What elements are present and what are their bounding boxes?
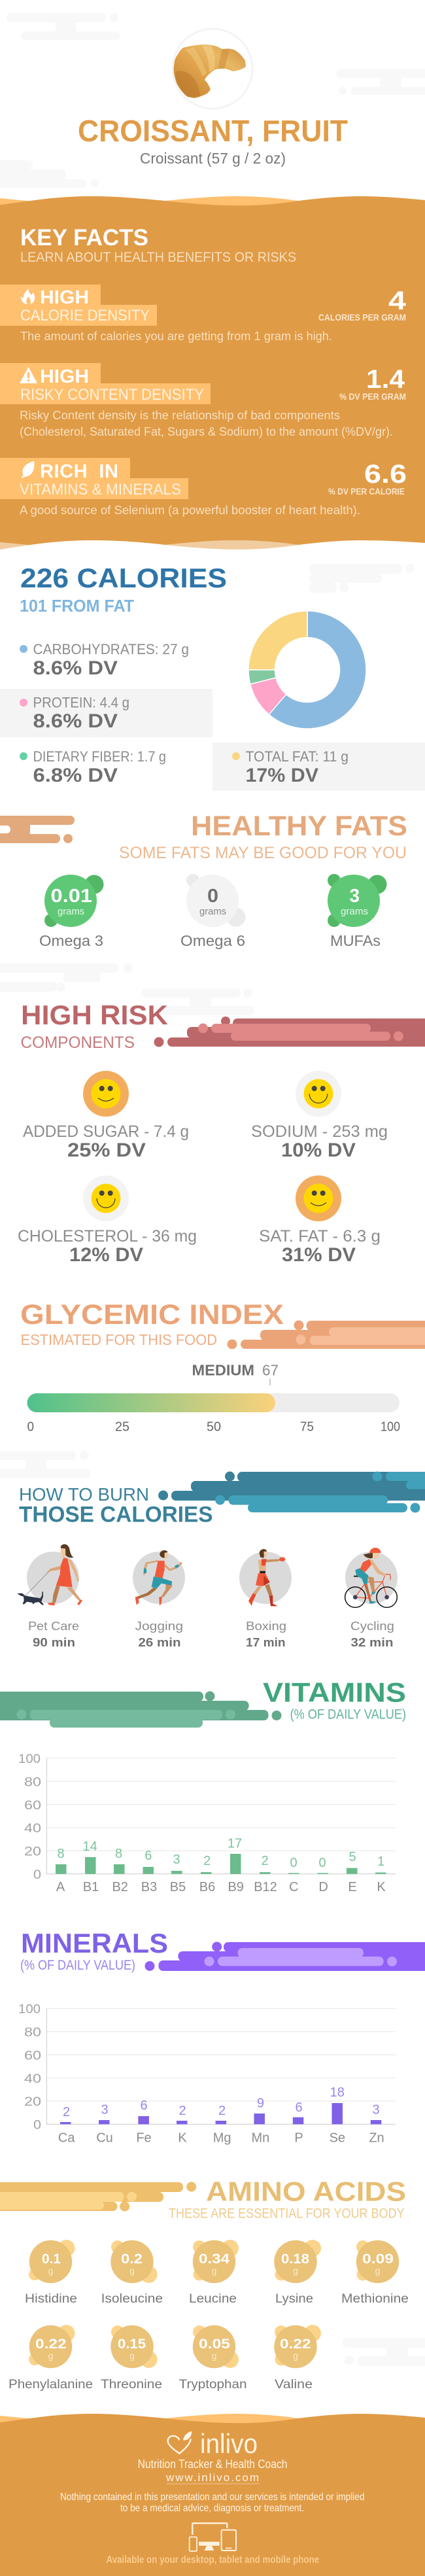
- amino: threonine: [101, 2325, 162, 2392]
- bar chart: vitamins: C: [289, 1880, 299, 1894]
- bar chart: minerals: 6: [140, 2098, 148, 2113]
- icon: woman walking dog: [17, 1544, 82, 1605]
- panel: footer: [0, 2414, 425, 2576]
- amino: methionine: 0.09: [362, 2252, 394, 2267]
- bar chart: minerals: 2: [178, 2104, 186, 2118]
- amino: histidine: [25, 2240, 77, 2306]
- heading: 226 calories: 226 CALORIES: [20, 563, 227, 593]
- heading: AMINO ACIDS: [206, 2176, 406, 2207]
- disclaimer: Nothing contained in this presentation and our services is intended or implied: [60, 2492, 365, 2503]
- gauge scale: 75: [300, 1419, 314, 1434]
- bar chart: minerals: 3: [101, 2103, 109, 2117]
- duration: 17 min: [246, 1636, 286, 1649]
- icon: leaf: [22, 461, 34, 478]
- rating: HIGH: [40, 366, 89, 387]
- value: 4: [388, 287, 407, 315]
- subheading: (% OF DAILY VALUE): [20, 1958, 135, 1973]
- decoration: [158, 1472, 425, 1512]
- bar chart: vitamins: B5: [170, 1880, 186, 1894]
- fact: vitamins and minerals: [0, 458, 407, 517]
- legend: carbohydrates: [20, 641, 189, 679]
- availability note: Available on your desktop, tablet and mobile phone: [106, 2554, 319, 2566]
- amino: lysine: 0.18: [281, 2252, 309, 2267]
- logo: wordmark: inlivo: [200, 2428, 258, 2459]
- item: mufas: MUFAs: [330, 932, 381, 949]
- amino: phenylalanine: 0.22: [35, 2337, 67, 2352]
- amino: threonine: Threonine: [101, 2378, 162, 2392]
- amino: leucine: [189, 2240, 239, 2306]
- item: saturated fat: 31% DV: [282, 1244, 356, 1266]
- amino: valine: g: [293, 2350, 298, 2361]
- logo: heart and leaf: [168, 2431, 192, 2454]
- legend: carbohydrates: 8.6% DV: [33, 657, 118, 679]
- bar chart: minerals: 40: [24, 2072, 41, 2086]
- bar chart: minerals: [18, 2003, 396, 2146]
- bar chart: minerals: Fe: [136, 2131, 152, 2146]
- amino: phenylalanine: g: [48, 2350, 53, 2361]
- activity: cycling: [345, 1548, 398, 1649]
- item: saturated fat: [259, 1175, 381, 1266]
- bar chart: vitamins: 0: [290, 1856, 298, 1870]
- amino: isoleucine: 0.2: [121, 2252, 143, 2267]
- heading: GLYCEMIC INDEX: [20, 1299, 284, 1331]
- bar chart: vitamins: A: [56, 1880, 65, 1894]
- gauge label: 67: [262, 1362, 279, 1379]
- description: The amount of calories you are getting from 1 gram is high.: [20, 330, 332, 343]
- item: sodium: SODIUM - 253 mg: [251, 1123, 388, 1141]
- gauge label: [192, 1362, 279, 1385]
- bar chart: minerals: K: [178, 2131, 187, 2146]
- bar chart: minerals: Mn: [252, 2131, 269, 2146]
- panel: glycemic index: [20, 1299, 425, 1434]
- decoration: [0, 2182, 196, 2211]
- bar chart: vitamins: 60: [24, 1799, 41, 1813]
- description: [20, 409, 393, 438]
- bar chart: vitamins: 20: [24, 1845, 41, 1859]
- amino: threonine: 0.15: [118, 2337, 146, 2352]
- label: Boxing: [246, 1620, 286, 1633]
- subheading: COMPONENTS: [21, 1034, 135, 1052]
- gauge scale: 100: [381, 1419, 400, 1434]
- fact: calorie density: [0, 285, 407, 343]
- amino: lysine: Lysine: [275, 2292, 313, 2306]
- fact name: VITAMINS & MINERALS: [20, 481, 181, 498]
- bar chart: minerals: Cu: [96, 2131, 113, 2146]
- bar chart: vitamins: 8: [115, 1847, 122, 1861]
- bar chart: vitamins: 17: [228, 1837, 242, 1851]
- panel: vitamins: [0, 1677, 406, 1894]
- subheading: (% OF DAILY VALUE): [290, 1707, 406, 1722]
- unit: CALORIES PER GRAM: [318, 312, 406, 322]
- bar chart: minerals: Zn: [369, 2131, 384, 2146]
- bar chart: minerals: 2: [218, 2104, 226, 2118]
- amino: histidine: Histidine: [25, 2292, 77, 2306]
- panel: high risk components: [18, 1000, 425, 1266]
- bar chart: vitamins: B2: [112, 1880, 128, 1894]
- value: 6.6: [364, 460, 407, 489]
- activity: boxing: [239, 1549, 292, 1649]
- amino: tryptophan: [179, 2325, 247, 2392]
- icon: warning: [20, 367, 37, 383]
- heading: HEALTHY FATS: [191, 810, 407, 842]
- legend: protein: 8.6% DV: [33, 710, 118, 732]
- item: sodium: 10% DV: [281, 1140, 356, 1161]
- bar chart: minerals: P: [294, 2131, 303, 2146]
- icon: devices: [190, 2523, 236, 2551]
- legend: dietary fiber: 6.8% DV: [33, 765, 118, 786]
- heading: MINERALS: [21, 1928, 168, 1958]
- decoration: [145, 1941, 425, 1971]
- rating: HIGH: [40, 287, 89, 308]
- amino: lysine: [274, 2240, 321, 2306]
- gauge scale: 0: [27, 1419, 34, 1434]
- label: Cycling: [350, 1620, 394, 1633]
- subheading: from fat: 101 FROM FAT: [20, 596, 134, 616]
- icon: cyclist: [345, 1548, 397, 1607]
- item: mufas: grams: [341, 906, 368, 917]
- icon: croissant in circle: [173, 29, 252, 109]
- subheading: LEARN ABOUT HEALTH BENEFITS OR RISKS: [20, 250, 296, 265]
- legend: total fat: 17% DV: [246, 765, 318, 786]
- bar chart: minerals: Se: [330, 2131, 345, 2146]
- item: omega 6: Omega 6: [180, 932, 245, 949]
- bar chart: minerals: Ca: [58, 2131, 75, 2146]
- amino: leucine: Leucine: [189, 2292, 237, 2306]
- item: omega 6: [180, 874, 246, 949]
- amino: tryptophan: g: [212, 2350, 216, 2361]
- bar chart: vitamins: B1: [83, 1880, 99, 1894]
- disclaimer: to be a medical advice, diagnosis or treatment.: [120, 2503, 304, 2514]
- legend: protein: [20, 695, 129, 732]
- bar chart: vitamins: D: [318, 1880, 328, 1894]
- description: (Cholesterol, Saturated Fat, Sugars & Sodium) to the amount (%DV/gr).: [20, 425, 393, 438]
- bar chart: vitamins: B6: [199, 1880, 215, 1894]
- decoration: [0, 816, 75, 843]
- amino: methionine: Methionine: [341, 2292, 409, 2306]
- bar chart: vitamins: K: [377, 1880, 386, 1894]
- bar chart: minerals: 9: [257, 2097, 264, 2111]
- bar chart: minerals: 18: [330, 2085, 345, 2100]
- bar chart: vitamins: [18, 1752, 396, 1894]
- description: Risky Content density is the relationship of bad components: [20, 409, 340, 422]
- bar chart: vitamins: 5: [348, 1850, 356, 1864]
- heading line 2: THOSE CALORIES: [19, 1502, 213, 1527]
- bar chart: vitamins: 0: [33, 1868, 41, 1882]
- item: omega 3: 0.01: [51, 886, 92, 907]
- legend: total fat: [232, 748, 348, 786]
- bar chart: vitamins: 0: [318, 1856, 326, 1870]
- subheading: SOME FATS MAY BE GOOD FOR YOU: [119, 844, 407, 862]
- legend: protein: PROTEIN: 4.4 g: [33, 695, 129, 710]
- bar chart: vitamins: 100: [18, 1752, 41, 1766]
- item: omega 6: grams: [199, 906, 226, 917]
- bar chart: vitamins: B3: [141, 1880, 157, 1894]
- heading: key facts: KEY FACTS: [20, 225, 148, 251]
- donut chart: [248, 611, 366, 729]
- serving size: Croissant (57 g / 2 oz): [140, 150, 286, 167]
- amino: threonine: g: [129, 2350, 135, 2361]
- item: omega 3: [39, 875, 103, 949]
- item: saturated fat: SAT. FAT - 6.3 g: [259, 1227, 381, 1245]
- fact: risky content density: [0, 363, 406, 438]
- amino: isoleucine: g: [129, 2265, 135, 2276]
- panel: minerals: [18, 1928, 425, 2146]
- item: omega 3: grams: [58, 906, 84, 917]
- item: cholesterol: CHOLESTEROL - 36 mg: [18, 1227, 197, 1245]
- amino: tryptophan: 0.05: [199, 2337, 230, 2352]
- duration: 26 min: [139, 1636, 180, 1649]
- tagline: Nutrition Tracker & Health Coach: [138, 2458, 288, 2471]
- fact name: CALORIE DENSITY: [20, 307, 150, 324]
- gauge label: MEDIUM: [192, 1362, 254, 1379]
- amino: valine: [274, 2325, 321, 2392]
- label: Pet Care: [28, 1620, 79, 1633]
- icon: runner: [135, 1550, 182, 1606]
- disclaimer: [60, 2492, 365, 2514]
- item: omega 3: Omega 3: [39, 932, 103, 949]
- gauge bar: [27, 1393, 400, 1412]
- label: Jogging: [135, 1620, 183, 1633]
- value: 1.4: [366, 365, 405, 394]
- panel: key facts: [0, 196, 425, 549]
- amino: phenylalanine: Phenylalanine: [8, 2378, 93, 2392]
- bar chart: vitamins: 6: [144, 1849, 152, 1863]
- bar chart: minerals: 100: [18, 2003, 41, 2017]
- bar chart: vitamins: E: [348, 1880, 357, 1894]
- unit: % DV PER GRAM: [339, 391, 406, 402]
- amino: leucine: g: [212, 2265, 216, 2276]
- activity: pet care: [17, 1544, 82, 1649]
- decoration: [0, 1692, 281, 1728]
- bar chart: minerals: 0: [33, 2119, 41, 2132]
- legend: total fat: TOTAL FAT: 11 g: [246, 748, 348, 765]
- bar chart: vitamins: 14: [82, 1839, 97, 1854]
- bar chart: vitamins: 1: [377, 1854, 384, 1869]
- bar chart: vitamins: 2: [261, 1854, 269, 1868]
- panel: calories: [0, 563, 425, 791]
- bar chart: minerals: 80: [24, 2026, 41, 2040]
- bar chart: minerals: Mg: [213, 2131, 231, 2146]
- panel: amino acids: [0, 2176, 409, 2392]
- bar chart: vitamins: 40: [24, 1822, 41, 1836]
- item: added sugar: ADDED SUGAR - 7.4 g: [23, 1123, 189, 1141]
- bar chart: vitamins: 80: [24, 1775, 41, 1789]
- legend: dietary fiber: DIETARY FIBER: 1.7 g: [33, 748, 166, 765]
- item: added sugar: [23, 1071, 189, 1161]
- icon: flame: [21, 288, 35, 304]
- activity: jogging: [133, 1550, 185, 1649]
- legend: dietary fiber: [20, 748, 166, 786]
- gauge scale: [27, 1419, 400, 1434]
- amino: phenylalanine: [8, 2325, 93, 2392]
- item: mufas: 3: [349, 886, 360, 907]
- amino: leucine: 0.34: [199, 2252, 230, 2267]
- gauge scale: 50: [207, 1419, 221, 1434]
- unit: % DV PER CALORIE: [328, 486, 405, 496]
- bar chart: vitamins: B12: [254, 1880, 277, 1894]
- duration: 32 min: [350, 1636, 394, 1649]
- item: cholesterol: [18, 1175, 197, 1266]
- panel: healthy fats: [0, 810, 407, 949]
- bar chart: vitamins: 8: [57, 1847, 65, 1861]
- subheading: ESTIMATED FOR THIS FOOD: [21, 1331, 217, 1348]
- bar chart: vitamins: 3: [173, 1853, 180, 1867]
- amino: valine: Valine: [275, 2378, 313, 2392]
- rating: RICH IN: [40, 461, 118, 482]
- amino: tryptophan: Tryptophan: [179, 2378, 247, 2392]
- description: A good source of Selenium (a powerful booster of heart health).: [20, 504, 360, 517]
- fact name: RISKY CONTENT DENSITY: [20, 386, 204, 404]
- header: food image and title: [78, 29, 348, 167]
- item: omega 6: 0: [207, 886, 218, 907]
- amino: isoleucine: [101, 2240, 163, 2306]
- panel: how to burn those calories: [17, 1472, 425, 1649]
- bar chart: minerals: 2: [63, 2105, 70, 2119]
- heading: HIGH RISK: [21, 1000, 168, 1030]
- website link: www.inlivo.com: [165, 2471, 259, 2484]
- item: sodium: [251, 1071, 388, 1161]
- amino: methionine: [341, 2240, 409, 2306]
- heading: VITAMINS: [263, 1677, 406, 1707]
- amino: lysine: g: [293, 2265, 298, 2276]
- amino: valine: 0.22: [280, 2337, 311, 2352]
- bar chart: minerals: 3: [372, 2103, 380, 2117]
- bar chart: minerals: 20: [24, 2095, 41, 2109]
- bar chart: vitamins: B9: [228, 1880, 244, 1894]
- duration: 90 min: [33, 1636, 75, 1649]
- amino: histidine: 0.1: [42, 2252, 61, 2267]
- item: mufas: [328, 874, 387, 949]
- title: CROISSANT, FRUIT: [78, 114, 348, 148]
- heading line 1: HOW TO BURN: [19, 1484, 149, 1505]
- icon: boxer: [248, 1549, 285, 1606]
- legend: carbohydrates: CARBOHYDRATES: 27 g: [33, 641, 189, 657]
- bar chart: minerals: 60: [24, 2049, 41, 2063]
- amino: histidine: g: [48, 2265, 53, 2276]
- gauge scale: 25: [115, 1419, 129, 1434]
- amino: methionine: g: [375, 2265, 380, 2276]
- bar chart: vitamins: 2: [203, 1854, 211, 1868]
- item: added sugar: 25% DV: [67, 1140, 146, 1161]
- decoration: [228, 1320, 425, 1349]
- bar chart: minerals: 6: [295, 2100, 303, 2115]
- decoration: [154, 1017, 425, 1047]
- item: cholesterol: 12% DV: [69, 1244, 143, 1266]
- amino: isoleucine: Isoleucine: [101, 2292, 163, 2306]
